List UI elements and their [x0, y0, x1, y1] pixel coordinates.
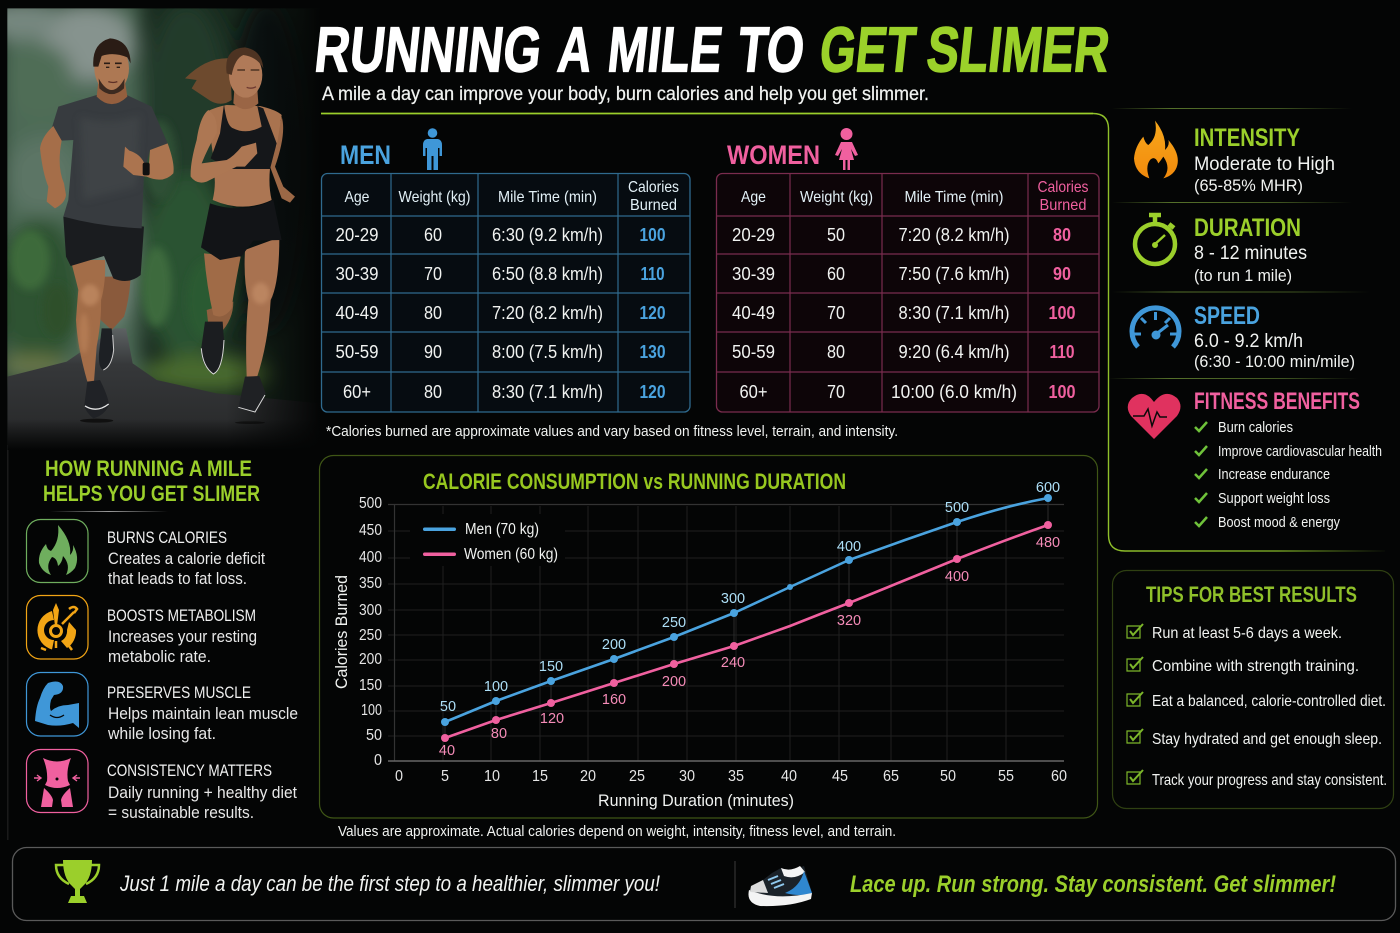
- x axis labels: 30: [679, 768, 695, 785]
- benefit: burns calories: [26, 520, 265, 588]
- x axis labels: [395, 768, 1067, 785]
- x axis labels: 25: [629, 768, 645, 785]
- icon: man: [423, 128, 442, 170]
- men row 30-39: [336, 264, 664, 284]
- y axis labels: 150: [359, 677, 382, 694]
- heading: how running helps: HELPS YOU GET SLIMER: [43, 481, 260, 506]
- icon: orange flame: [1134, 121, 1178, 178]
- x axis labels: 50: [940, 768, 956, 785]
- tips list: [1127, 624, 1387, 789]
- women row 60+: 60+: [740, 382, 768, 402]
- men row 40-49: 40-49: [336, 303, 378, 323]
- title: TO: [735, 14, 808, 85]
- y axis labels: [359, 495, 382, 769]
- x axis labels: 35: [728, 768, 744, 785]
- x axis labels: 5: [441, 768, 449, 785]
- icon: woman: [835, 128, 858, 170]
- x axis labels: 60: [1051, 768, 1067, 785]
- men row 30-39: 70: [424, 264, 442, 284]
- x axis labels: 10: [484, 768, 500, 785]
- x axis labels: 0: [395, 768, 403, 785]
- stat: intensity: [1134, 121, 1335, 195]
- tips list: Combine with strength training.: [1152, 658, 1359, 675]
- line series: men: [440, 480, 1060, 726]
- line series: women: 120: [540, 711, 564, 727]
- line series: men: 500: [945, 500, 969, 516]
- women row 40-49: [732, 303, 1076, 323]
- men table header: Mile Time (min): [498, 189, 597, 206]
- women table header: Mile Time (min): [904, 189, 1004, 206]
- heading: men: MEN: [340, 140, 391, 170]
- men row 20-29: 60: [424, 225, 442, 245]
- chart grid: [388, 504, 1064, 761]
- title: MILE: [605, 14, 726, 85]
- men row 60+: 80: [424, 382, 442, 402]
- line series: women: 240: [721, 655, 745, 671]
- heading: how running helps: [43, 456, 260, 506]
- subtitle: A mile a day can improve your body, burn calories and help you get slimmer.: [322, 83, 929, 105]
- women row 40-49: 40-49: [732, 303, 775, 323]
- women row 40-49: 100: [1048, 303, 1076, 323]
- stat: duration: [1135, 214, 1307, 285]
- text: BOOSTS METABOLISM: [107, 606, 256, 625]
- line series: women: 480: [1036, 535, 1060, 551]
- women table header: Calories: [1038, 179, 1088, 196]
- text: 8 - 12 minutes: [1194, 243, 1307, 264]
- text: [107, 528, 265, 588]
- men row 50-59: 130: [640, 342, 666, 362]
- x axis labels: 55: [998, 768, 1014, 785]
- y axis labels: 300: [359, 602, 382, 619]
- men row 60+: 8:30 (7.1 km/h): [492, 382, 603, 402]
- men table header: Calories: [628, 179, 679, 196]
- bottom banner: [12, 848, 1396, 920]
- table: women: [716, 174, 1099, 412]
- women row 30-39: [732, 264, 1071, 284]
- women row 60+: 70: [827, 382, 845, 402]
- benefit checklist: [1195, 420, 1382, 531]
- men table header: Age: [344, 189, 370, 206]
- women row 50-59: 80: [827, 342, 845, 362]
- benefit checklist: Burn calories: [1218, 420, 1293, 436]
- women row 50-59: 9:20 (6.4 km/h): [898, 342, 1010, 362]
- text: [1194, 302, 1355, 371]
- text: Creates a calorie deficit: [108, 550, 265, 568]
- text: (65-85% MHR): [1194, 176, 1303, 195]
- text: 6.0 - 9.2 km/h: [1194, 331, 1303, 352]
- line series: women: 320: [837, 613, 861, 629]
- text: DURATION: [1194, 214, 1301, 242]
- icon: trophy: [56, 860, 99, 903]
- panel: tips: [1112, 570, 1394, 808]
- chart footnote: Values are approximate. Actual calories depend on weight, intensity, fitness level, and terrain.: [338, 824, 896, 840]
- title: SLIMER: [924, 14, 1113, 85]
- text: [107, 761, 297, 822]
- men row 60+: [343, 382, 666, 402]
- banner message: Just 1 mile a day can be the first step to a healthier, slimmer you!: [119, 871, 660, 896]
- men row 30-39: 110: [640, 264, 664, 284]
- line series: men: 600: [1036, 480, 1060, 496]
- heading: how running helps: HOW RUNNING A MILE: [45, 456, 252, 481]
- text: PRESERVES MUSCLE: [107, 683, 251, 702]
- women table header: Burned: [1040, 197, 1086, 214]
- y axis labels: 0: [374, 752, 382, 769]
- icon: running shoe: [748, 866, 812, 906]
- women row 60+: 100: [1048, 382, 1076, 402]
- benefit checklist: Boost mood & energy: [1218, 515, 1341, 531]
- stat: fitness benefits: [1128, 388, 1382, 531]
- text: [107, 683, 298, 743]
- text: that leads to fat loss.: [108, 570, 247, 588]
- text: Moderate to High: [1194, 154, 1335, 175]
- text: Helps maintain lean muscle: [108, 705, 298, 723]
- women row 30-39: 30-39: [732, 264, 775, 284]
- men row 60+: 60+: [343, 382, 371, 402]
- line series: men: 300: [721, 591, 745, 607]
- text: metabolic rate.: [108, 648, 211, 666]
- tips list: Run at least 5-6 days a week.: [1152, 625, 1342, 642]
- legend: [423, 521, 558, 563]
- panel outline: tables and stats: [321, 114, 1385, 551]
- benefit checklist: Support weight loss: [1218, 491, 1330, 507]
- heading: men: [340, 128, 442, 170]
- text: [1194, 124, 1335, 195]
- text: [107, 606, 257, 666]
- y axis labels: 50: [366, 727, 382, 744]
- women row 20-29: 7:20 (8.2 km/h): [898, 225, 1010, 245]
- line series: men: 150: [539, 659, 563, 675]
- women table header: [741, 179, 1088, 214]
- y axis labels: 500: [359, 495, 382, 512]
- text: [1194, 214, 1307, 285]
- women row 60+: [740, 382, 1076, 402]
- women row 20-29: [732, 225, 1071, 245]
- runner: man: [40, 38, 174, 418]
- men row 50-59: 90: [424, 342, 442, 362]
- men row 50-59: [336, 342, 666, 362]
- line series: men: 50: [440, 699, 456, 715]
- men row 60+: 120: [640, 382, 666, 402]
- women row 20-29: 80: [1053, 225, 1071, 245]
- line series: women: 160: [602, 692, 626, 708]
- women table header: Age: [741, 189, 766, 206]
- women row 40-49: 70: [827, 303, 845, 323]
- benefit: consistency matters: [26, 750, 297, 822]
- x axis labels: 45: [832, 768, 848, 785]
- men row 40-49: [336, 303, 666, 323]
- men row 50-59: 8:00 (7.5 km/h): [492, 342, 603, 362]
- x axis labels: 15: [532, 768, 548, 785]
- women table header: Weight (kg): [800, 189, 873, 206]
- women row 50-59: [732, 342, 1074, 362]
- men row 40-49: 80: [424, 303, 442, 323]
- women row 20-29: 50: [827, 225, 845, 245]
- legend: Women (60 kg): [464, 546, 558, 563]
- line series: women: 400: [945, 569, 969, 585]
- men row 50-59: 50-59: [336, 342, 378, 362]
- line series: men: 200: [602, 637, 626, 653]
- x axis labels: 20: [580, 768, 596, 785]
- heading: women: [727, 128, 858, 170]
- legend: Men (70 kg): [465, 521, 539, 538]
- women row 30-39: 60: [827, 264, 845, 284]
- text: while losing fat.: [107, 725, 216, 743]
- line series: men: 400: [837, 539, 861, 555]
- line series: women: 200: [662, 674, 686, 690]
- text: = sustainable results.: [108, 804, 254, 822]
- text: INTENSITY: [1194, 124, 1300, 152]
- line series: women: 80: [491, 726, 507, 742]
- icon: stopwatch: [1135, 215, 1175, 264]
- line series: men: 100: [484, 679, 508, 695]
- text: Increases your resting: [108, 628, 257, 646]
- benefit: preserves muscle: [26, 672, 298, 743]
- icon: speedometer: [1132, 308, 1179, 347]
- runner: woman: [185, 47, 295, 413]
- men row 30-39: 6:50 (8.8 km/h): [492, 264, 603, 284]
- men row 20-29: [336, 225, 666, 245]
- y axis labels: 100: [361, 702, 382, 719]
- table footnote: *Calories burned are approximate values and vary based on fitness level, terrain, and intensity.: [326, 424, 898, 440]
- icon: heart with pulse: [1128, 394, 1180, 439]
- women row 50-59: 50-59: [732, 342, 775, 362]
- title: RUNNING: [312, 14, 545, 85]
- y axis labels: 350: [359, 575, 382, 592]
- photo: two runners on a forest road: [0, 0, 320, 450]
- men row 40-49: 120: [640, 303, 666, 323]
- men row 20-29: 20-29: [336, 225, 378, 245]
- benefit checklist: Increase endurance: [1218, 467, 1330, 483]
- title: GET: [817, 14, 919, 85]
- heading: women: WOMEN: [727, 140, 820, 170]
- text: Daily running + healthy diet: [108, 784, 297, 802]
- table: men: [321, 174, 690, 412]
- icon: blue bicep: [26, 672, 88, 736]
- y axis labels: 450: [359, 522, 382, 539]
- text: BURNS CALORIES: [107, 528, 227, 547]
- y axis labels: 200: [359, 651, 382, 668]
- women row 60+: 10:00 (6.0 km/h): [891, 382, 1017, 402]
- men table header: Burned: [630, 197, 677, 214]
- text: SPEED: [1194, 302, 1260, 330]
- women row 50-59: 110: [1050, 342, 1074, 362]
- men row 20-29: 100: [640, 225, 666, 245]
- women row 40-49: 8:30 (7.1 km/h): [898, 303, 1010, 323]
- text: (to run 1 mile): [1194, 266, 1292, 285]
- y axis labels: 400: [359, 549, 382, 566]
- text: (6:30 - 10:00 min/mile): [1194, 352, 1355, 371]
- men row 20-29: 6:30 (9.2 km/h): [492, 225, 603, 245]
- title: [312, 14, 1113, 85]
- women row 30-39: 90: [1053, 264, 1071, 284]
- connector lines between series: [445, 498, 1048, 738]
- chart title: CALORIE CONSUMPTION vs RUNNING DURATION: [423, 469, 846, 494]
- line series: women: [439, 521, 1060, 759]
- icon: pink waist: [26, 750, 88, 812]
- men table header: Weight (kg): [398, 189, 470, 206]
- x axis labels: 40: [781, 768, 797, 785]
- stat: speed: [1132, 302, 1355, 371]
- men row 40-49: 7:20 (8.2 km/h): [492, 303, 603, 323]
- title: A: [555, 14, 596, 85]
- women row 30-39: 7:50 (7.6 km/h): [898, 264, 1010, 284]
- y axis title: Calories Burned: [332, 575, 351, 689]
- men table header: [344, 179, 679, 214]
- line series: men: 250: [662, 615, 686, 631]
- x axis title: Running Duration (minutes): [598, 791, 794, 810]
- y axis labels: 250: [359, 627, 382, 644]
- icon: orange gauge: [26, 596, 88, 659]
- women row 20-29: 20-29: [732, 225, 775, 245]
- benefit: boosts metabolism: [26, 596, 257, 666]
- text: CONSISTENCY MATTERS: [107, 761, 272, 780]
- panel: line chart: [320, 456, 1098, 818]
- line series: women: 40: [439, 743, 455, 759]
- men row 30-39: 30-39: [336, 264, 378, 284]
- x axis labels: 65: [883, 768, 899, 785]
- icon: green flame: [26, 520, 88, 582]
